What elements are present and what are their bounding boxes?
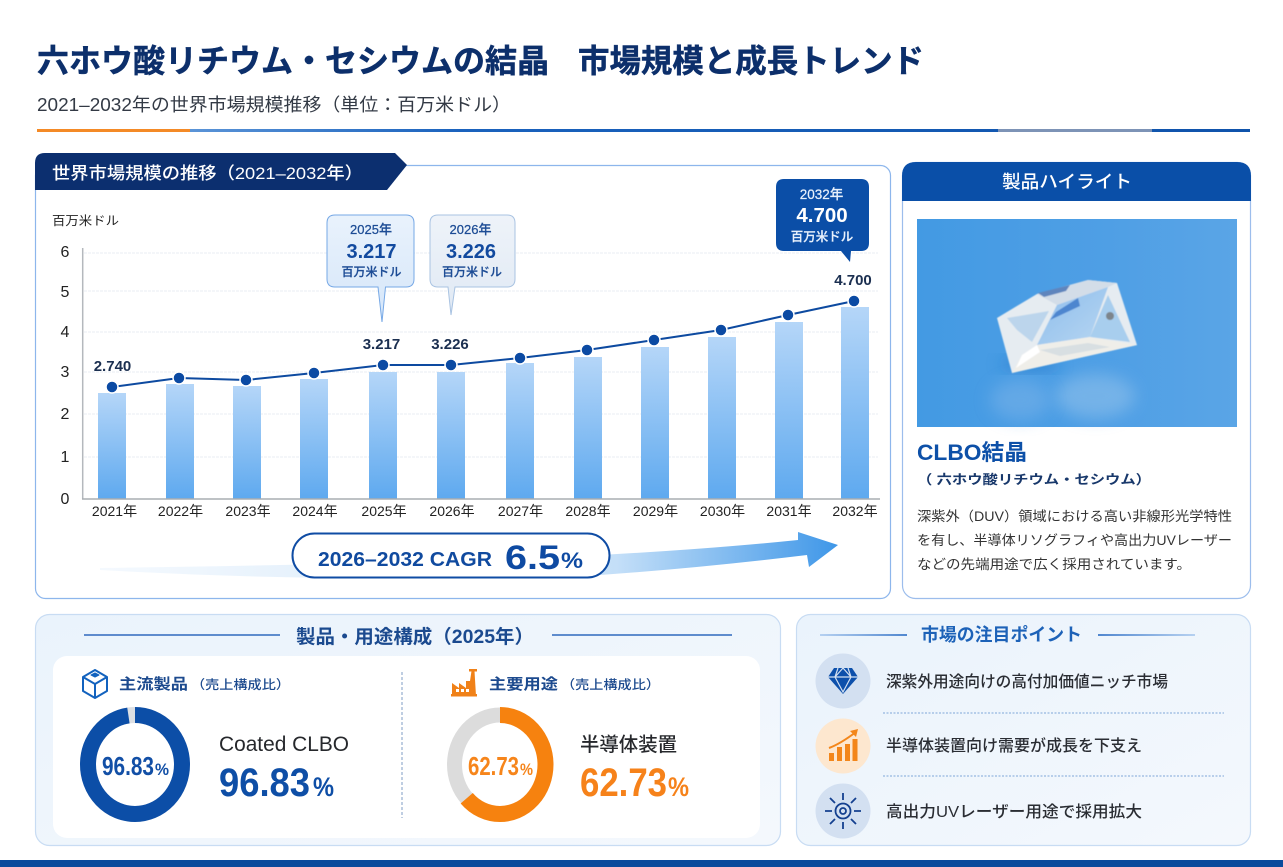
product name: Coated CLBO: [219, 733, 349, 756]
bar chart: 2031年: [766, 503, 812, 519]
callout: 2026: 3.226: [446, 241, 496, 263]
CAGR badge: 6.5: [505, 539, 560, 577]
panel: product and application mix: [36, 614, 780, 846]
point 2: [816, 718, 1142, 774]
group: main application: [451, 669, 689, 814]
bar chart: 5: [61, 284, 70, 301]
share value: %: [668, 772, 689, 802]
bar chart: 6: [61, 244, 70, 261]
panel heading banner: 世界市場規模の推移（2021–2032年）: [52, 164, 363, 183]
panel heading banner: [35, 153, 407, 190]
label: 主流製品: [119, 675, 188, 693]
callout: 2032: 2032年: [800, 186, 843, 202]
group: main product: （売上構成比）: [191, 677, 290, 692]
bar chart: 2021年: [92, 503, 137, 519]
donut chart: 62.73%: %: [520, 760, 533, 779]
panel heading: [902, 162, 1251, 201]
bar chart: 4: [61, 324, 70, 341]
icon: factory: [451, 669, 477, 696]
group: main product: [83, 670, 349, 814]
panel heading: 製品・用途構成（2025年）: [296, 625, 534, 648]
bar chart: 3: [61, 364, 70, 381]
bar chart: 2: [61, 406, 70, 423]
product subtitle: （ 六ホウ酸リチウム・セシウム）: [917, 472, 1151, 487]
bar chart: 0: [61, 491, 70, 508]
point 3: [816, 784, 1142, 838]
donut chart: 62.73%: [454, 715, 546, 814]
panel: market highlights: [796, 614, 1250, 846]
icon: box: [83, 670, 107, 698]
share value: 96.83: [219, 761, 310, 805]
line series: [106, 295, 860, 393]
bar chart: 2025年: [361, 503, 407, 519]
callout: 2032: 4.700: [796, 204, 848, 227]
share value: 62.73: [580, 761, 667, 805]
bar chart: 2022年: [158, 503, 203, 519]
icon: diamond: [816, 654, 870, 708]
product description: [917, 508, 1232, 572]
donut chart: 96.83%: %: [155, 760, 169, 779]
bar chart: 2026年: [429, 503, 475, 519]
donut chart: 62.73%: 62.73: [468, 751, 519, 781]
callout: 2025: 3.217: [346, 241, 397, 263]
value labels: 4.700: [834, 272, 872, 289]
subtitle: 2021–2032年の世界市場規模推移（単位：百万米ドル）: [37, 95, 511, 115]
panel heading: 製品ハイライト: [1002, 172, 1132, 192]
title: 市場規模と成長トレンド: [578, 43, 924, 79]
callout: 2032: [776, 179, 869, 262]
bar chart: 2023年: [225, 503, 271, 519]
callout: 2026: 百万米ドル: [442, 264, 502, 279]
value labels: 3.217: [363, 336, 400, 353]
value labels: 3.226: [431, 336, 469, 353]
bar chart: 2028年: [565, 503, 611, 519]
callout: 2025: 2025年: [350, 222, 392, 237]
point 2: 半導体装置向け需要が成長を下支え: [886, 736, 1142, 755]
callout: 2026: [430, 215, 515, 315]
callout: 2032: 百万米ドル: [791, 229, 853, 244]
bar chart: 2029年: [633, 503, 678, 519]
donut chart: 96.83%: 96.83: [102, 751, 154, 781]
inner card: [53, 656, 760, 838]
panel: product highlight: [902, 162, 1251, 598]
bar chart: 1: [61, 449, 70, 466]
point 3: 高出力UVレーザー用途で採用拡大: [886, 803, 1142, 821]
panel: market size chart: [35, 153, 890, 598]
icon: growth chart: [816, 718, 870, 774]
photo: CLBO crystal: [917, 219, 1237, 427]
product description: を有し、半導体リソグラフィや高出力UVレーザー: [917, 532, 1232, 548]
CAGR badge: [292, 534, 610, 578]
value labels: [94, 272, 872, 375]
bar chart: 2027年: [498, 503, 543, 519]
header rule: [37, 129, 1250, 132]
share value: %: [313, 772, 334, 802]
bar chart: 2030年: [700, 503, 745, 519]
CAGR badge: %: [561, 548, 583, 573]
callout: 2025: [327, 215, 414, 322]
label: 主要用途: [489, 675, 558, 693]
bar chart: 2024年: [292, 503, 338, 519]
footer bar: [0, 860, 1283, 867]
panel heading: 市場の注目ポイント: [921, 624, 1082, 645]
title: 六ホウ酸リチウム・セシウムの結晶: [37, 43, 549, 79]
point 1: 深紫外用途向けの高付加価値ニッチ市場: [886, 673, 1168, 691]
value labels: 2.740: [94, 358, 131, 375]
icon: UV laser: [816, 784, 870, 838]
arrow: CAGR trend: [100, 532, 838, 579]
donut chart: 96.83%: [88, 715, 182, 814]
bar chart: 2032年: [832, 503, 878, 519]
product name: CLBO結晶: [917, 440, 1027, 465]
bar chart: [61, 244, 880, 519]
application name: 半導体装置: [580, 734, 677, 756]
group: main application: （売上構成比）: [561, 677, 660, 692]
CAGR badge: 2026–2032 CAGR: [318, 549, 493, 571]
axis unit label: 百万米ドル: [52, 214, 119, 228]
callout: 2025: 百万米ドル: [341, 264, 402, 279]
point 1: [816, 654, 1168, 708]
title: [37, 43, 924, 79]
product description: などの先端用途で広く採用されています。: [917, 557, 1191, 572]
product description: 深紫外（DUV）領域における高い非線形光学特性: [917, 508, 1232, 524]
callout: 2026: 2026年: [450, 222, 491, 237]
